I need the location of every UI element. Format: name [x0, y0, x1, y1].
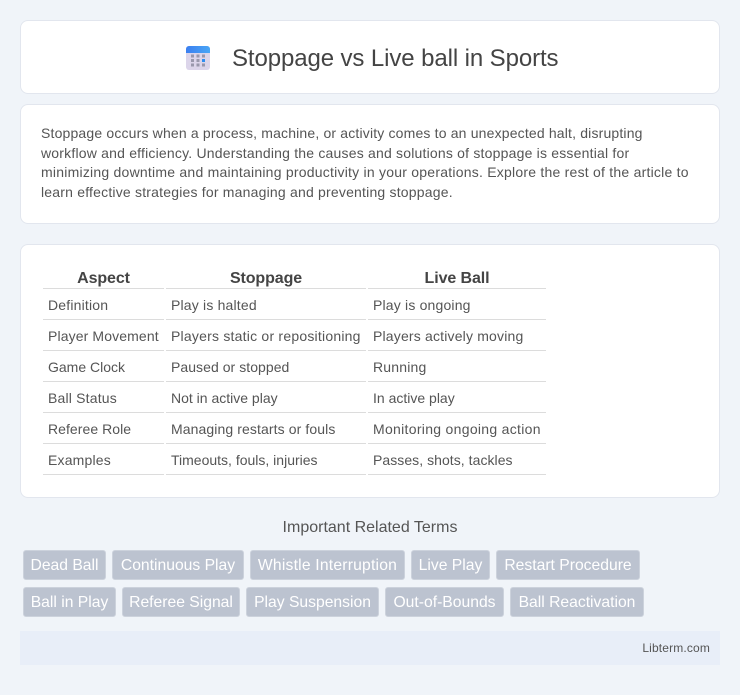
tag: Continuous Play — [112, 550, 244, 580]
intro paragraph — [41, 125, 689, 200]
tag: Dead Ball: Dead Ball — [30, 557, 99, 574]
row: Definition: Definition — [48, 297, 108, 313]
row: Game Clock: Game Clock — [48, 359, 125, 375]
tag: Out-of-Bounds — [385, 587, 504, 617]
row: Examples: Timeouts, fouls, injuries — [171, 452, 318, 468]
row: Player Movement: Player Movement — [48, 328, 159, 344]
row: Definition: Play is halted — [171, 297, 257, 313]
tag: Continuous Play: Continuous Play — [121, 557, 235, 574]
row: Referee Role: Referee Role — [48, 421, 131, 437]
row: Ball Status — [48, 390, 455, 406]
row: Referee Role: Monitoring ongoing action — [373, 421, 541, 437]
row: Player Movement — [48, 328, 523, 344]
tag: Play Suspension: Play Suspension — [254, 594, 371, 611]
header: Stoppage: Stoppage — [230, 270, 302, 287]
row: Game Clock — [48, 359, 426, 375]
row: Examples: Examples — [48, 452, 111, 468]
header: Live Ball: Live Ball — [425, 270, 489, 287]
tag: Referee Signal: Referee Signal — [129, 594, 233, 611]
header panel — [20, 20, 720, 94]
header: Aspect: Aspect — [77, 270, 130, 287]
related terms heading: Important Related Terms — [283, 519, 457, 536]
row: Definition — [48, 297, 471, 313]
comparison table — [43, 270, 546, 475]
row: Player Movement: Players static or repositioning — [171, 328, 361, 344]
row: Examples — [48, 452, 513, 468]
row: Game Clock: Paused or stopped — [171, 359, 289, 375]
row: Ball Status: In active play — [373, 390, 455, 406]
tag: Ball Reactivation — [510, 587, 644, 617]
tag: Restart Procedure — [496, 550, 640, 580]
row: Ball Status: Not in active play — [171, 390, 278, 406]
row: Ball Status: Ball Status — [48, 390, 117, 406]
tag: Out-of-Bounds: Out-of-Bounds — [393, 594, 496, 611]
tag: Ball in Play: Ball in Play — [31, 594, 108, 611]
intro paragraph: learn effective strategies for managing and preventing stoppage. — [41, 184, 453, 200]
footer credit: Libterm.com — [642, 641, 710, 655]
comparison table panel — [20, 244, 720, 498]
intro paragraph: workflow and efficiency. Understanding the causes and solutions of stoppage is essential for — [41, 145, 629, 161]
row: Game Clock: Running — [373, 359, 426, 375]
tag: Ball Reactivation: Ball Reactivation — [519, 594, 635, 611]
icon: calendar — [186, 46, 210, 70]
tag: Whistle Interruption: Whistle Interruption — [258, 557, 397, 574]
footer bar — [20, 631, 720, 665]
tag: Whistle Interruption — [250, 550, 405, 580]
row: Examples: Passes, shots, tackles — [373, 452, 513, 468]
tag: Live Play: Live Play — [419, 557, 482, 574]
row: Referee Role — [48, 421, 541, 437]
intro text panel — [20, 104, 720, 224]
row: Definition: Play is ongoing — [373, 297, 471, 313]
tag: Live Play — [411, 550, 490, 580]
tag: Dead Ball — [23, 550, 106, 580]
intro paragraph: minimizing downtime and maintaining productivity in your operations. Explore the rest of the article to — [41, 164, 689, 180]
intro paragraph: Stoppage occurs when a process, machine, or activity comes to an unexpected halt, disrupting — [41, 125, 643, 141]
related term tags — [23, 550, 644, 617]
title: Stoppage vs Live ball in Sports — [232, 45, 558, 72]
tag: Play Suspension — [246, 587, 379, 617]
row: Referee Role: Managing restarts or fouls — [171, 421, 335, 437]
tag: Ball in Play — [23, 587, 116, 617]
tag: Restart Procedure: Restart Procedure — [504, 557, 632, 574]
tag: Referee Signal — [122, 587, 240, 617]
row: Player Movement: Players actively moving — [373, 328, 523, 344]
